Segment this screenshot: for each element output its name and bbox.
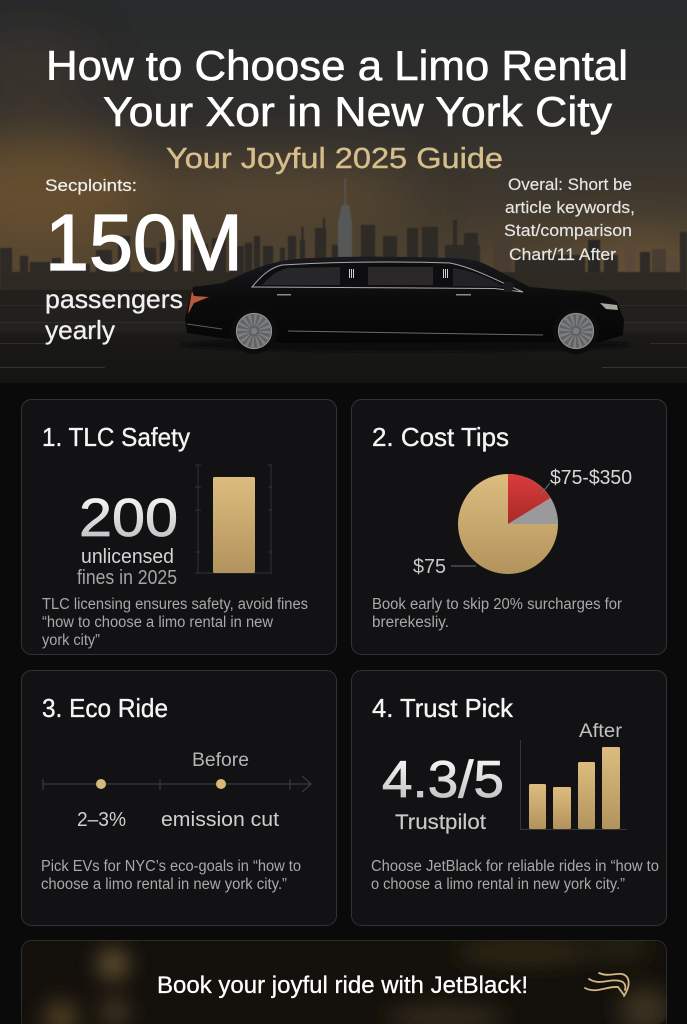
title: How to Choose a Limo Rental <box>46 42 628 89</box>
rear wheel <box>231 308 277 354</box>
wing mirror <box>502 282 514 292</box>
panel: trust pick <box>352 670 666 926</box>
door handles <box>277 294 471 296</box>
hero stat: passengers <box>45 284 183 314</box>
stat caption: fines in 2025 <box>77 567 177 589</box>
timeline chart: emission cut <box>161 809 279 831</box>
heading: 1. TLC Safety <box>42 422 190 452</box>
windows <box>262 267 340 285</box>
body text: Choose JetBlack for reliable rides in “how to <box>371 858 659 875</box>
icon: gold wings <box>585 973 629 996</box>
body text <box>372 596 622 631</box>
hero: city skyline at dusk <box>0 0 687 387</box>
hero side note: Chart/11 After <box>509 245 616 264</box>
hero stat: yearly <box>45 315 115 345</box>
headlight <box>600 303 618 310</box>
pie chart: $75-$350 <box>550 467 632 489</box>
body text: Pick EVs for NYC’s eco-goals in “how to <box>41 858 301 875</box>
heading: 2. Cost Tips <box>372 422 509 452</box>
hero side note: Stat/comparison <box>504 221 632 240</box>
bar chart: After <box>579 721 623 742</box>
rating stat: 4.3/5 <box>382 751 504 809</box>
body text <box>42 596 308 649</box>
hero side note <box>504 175 635 264</box>
body text: TLC licensing ensures safety, avoid fines <box>42 596 308 613</box>
road and barrier <box>0 290 687 386</box>
panel: TLC safety <box>22 400 336 654</box>
pie chart <box>413 467 632 578</box>
body text <box>371 858 659 893</box>
body text: choose a limo rental in new york city.” <box>41 876 287 893</box>
car body <box>185 257 624 343</box>
hero stat: 150M <box>45 198 243 287</box>
skyline landmark tower <box>338 178 352 293</box>
body text: brerekesliy. <box>372 614 449 631</box>
timeline chart: Before <box>192 750 249 771</box>
heading: 3. Eco Ride <box>42 693 168 723</box>
stat: 200: 200 <box>79 488 178 548</box>
bar chart <box>520 721 627 830</box>
body text: Book early to skip 20% surcharges for <box>372 596 622 613</box>
stat caption <box>77 546 177 589</box>
hero side note: Overal: Short be <box>508 175 632 194</box>
sill line <box>288 331 543 335</box>
panel: cost tips <box>352 400 666 654</box>
body text: “how to choose a limo rental in new <box>42 614 274 631</box>
call to action banner <box>22 938 671 1024</box>
call to action text: Book your joyful ride with JetBlack! <box>157 972 528 999</box>
door pillar marks <box>349 269 448 278</box>
hero side note: article keywords, <box>505 198 635 217</box>
heading: 4. Trust Pick <box>372 693 514 723</box>
chrome window line <box>252 262 523 292</box>
title <box>46 42 628 135</box>
title: Your Xor in New York City <box>103 88 612 135</box>
bar chart <box>195 465 272 573</box>
stat caption: unlicensed <box>81 546 174 568</box>
skyline buildings <box>0 218 687 294</box>
subtitle: Your Joyful 2025 Guide <box>166 143 503 175</box>
body text <box>41 858 301 893</box>
timeline chart <box>43 750 311 831</box>
limousine <box>180 257 630 354</box>
tail light <box>188 291 209 314</box>
body text: york city” <box>42 632 100 649</box>
pie chart: $75 <box>413 556 446 578</box>
rating caption: Trustpilot <box>395 811 486 834</box>
hero stat <box>45 176 243 345</box>
timeline chart: 2–3% <box>77 809 126 831</box>
hero stat: Secploints: <box>45 176 137 195</box>
body text: o choose a limo rental in new york city.” <box>371 876 625 893</box>
panel: eco ride <box>22 670 336 926</box>
front wheel <box>553 308 599 354</box>
